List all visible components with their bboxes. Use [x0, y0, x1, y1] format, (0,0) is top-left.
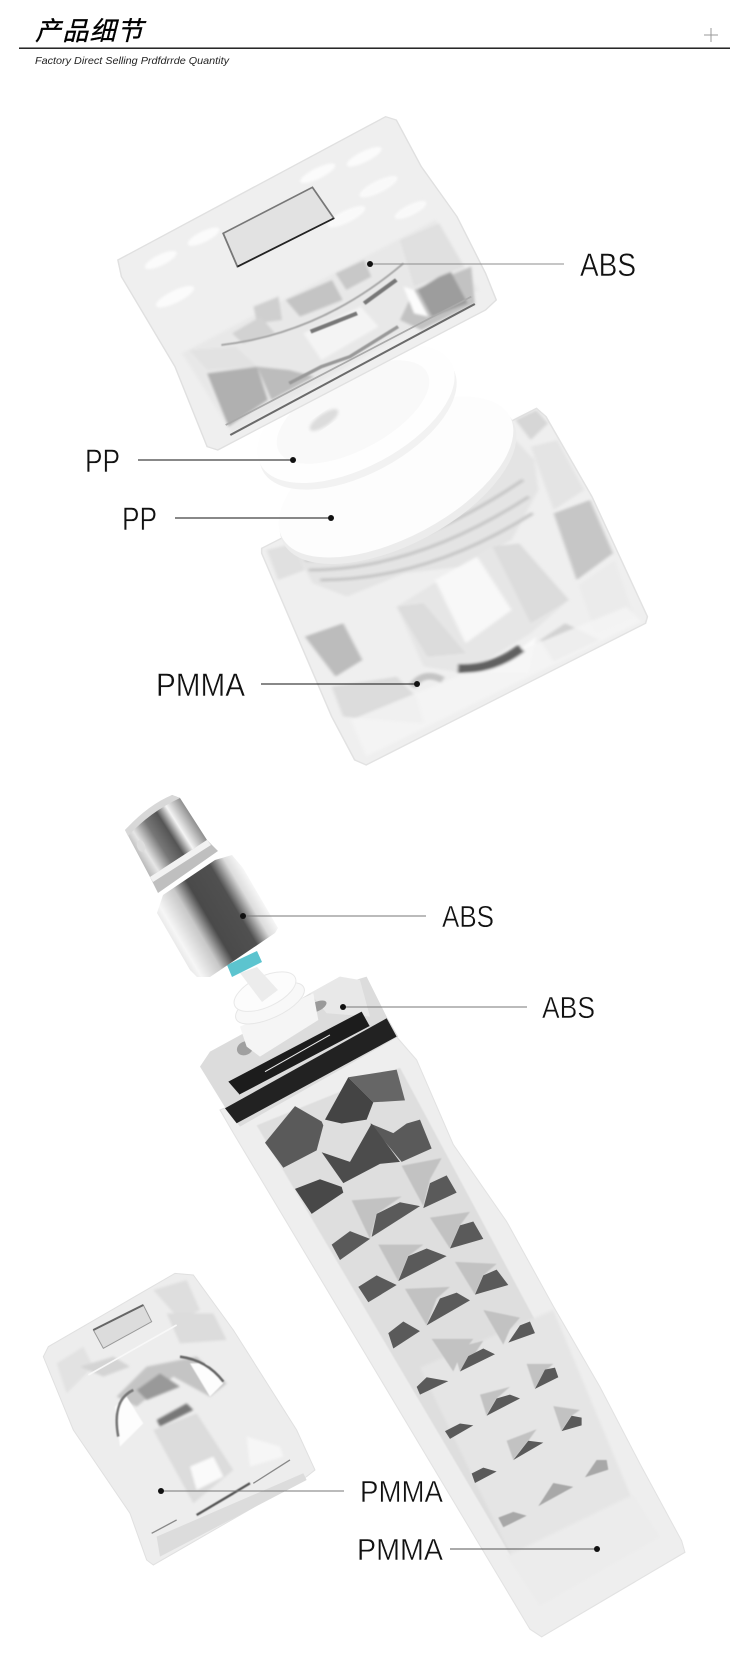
cap label PMMA: PMMA	[360, 1474, 443, 1509]
seal label PP	[122, 501, 334, 537]
header	[19, 16, 730, 67]
seal label PP: PP	[122, 501, 157, 537]
disc label PP: PP	[85, 443, 120, 479]
jar body	[262, 408, 647, 765]
collar label ABS: ABS	[542, 990, 595, 1025]
header rule	[19, 48, 730, 49]
disc label PP	[85, 443, 296, 479]
bottle label PMMA: PMMA	[357, 1532, 443, 1567]
black band	[228, 1012, 370, 1095]
bottle label PMMA	[357, 1532, 600, 1567]
subtitle: Factory Direct Selling Prdfdrrde Quantity	[35, 55, 230, 67]
title: 产品细节	[35, 16, 147, 46]
jar lid	[118, 117, 496, 450]
bottle collar and neck	[200, 964, 398, 1127]
cap label PMMA	[158, 1474, 443, 1509]
white neck	[228, 964, 318, 1057]
lid window	[223, 187, 334, 267]
plus icon	[704, 28, 718, 42]
cap window	[93, 1305, 152, 1348]
gray facets	[352, 1158, 580, 1460]
spray pump	[125, 795, 278, 1002]
pump label ABS: ABS	[442, 899, 494, 934]
lid label ABS: ABS	[580, 247, 636, 283]
pump label ABS	[240, 899, 494, 934]
collar label ABS	[340, 990, 595, 1025]
jar inner seal disc	[254, 363, 542, 598]
lid label ABS	[367, 247, 636, 283]
bottle body	[220, 1037, 685, 1637]
black band	[225, 1018, 397, 1123]
bottle cap	[43, 1273, 315, 1565]
lid inner seal disc	[236, 317, 479, 518]
dark facets	[265, 1070, 582, 1483]
jar label PMMA	[156, 667, 420, 703]
jar label PMMA: PMMA	[156, 667, 246, 703]
